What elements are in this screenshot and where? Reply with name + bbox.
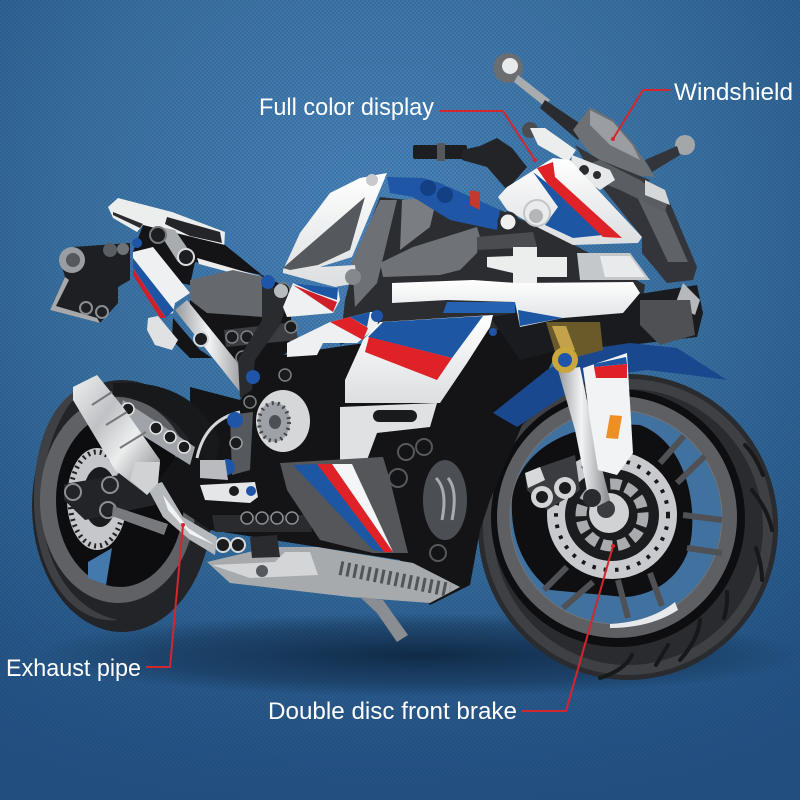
front wheel	[478, 374, 778, 680]
spokes	[544, 436, 722, 618]
front tyre tread cuts	[600, 445, 772, 678]
callout: exhaust pipe: Exhaust pipe	[6, 655, 141, 682]
white tank	[283, 173, 387, 287]
white piston strut	[570, 155, 615, 190]
callout: exhaust pipe	[6, 523, 185, 682]
fork and fender panel	[546, 322, 633, 510]
swingarm beam and arc	[118, 400, 258, 503]
fuel tank	[283, 173, 500, 307]
engine right side	[389, 439, 467, 561]
body dark mass	[150, 310, 560, 605]
handlebar	[413, 138, 527, 190]
tail panel with stripes	[133, 247, 190, 318]
lower fairing with stripes	[280, 457, 408, 553]
lower beam row	[212, 512, 312, 532]
grey rim	[497, 396, 737, 638]
front dark under-fairing	[490, 285, 703, 360]
white connector with cross	[200, 482, 258, 503]
dark right fairing	[580, 160, 697, 283]
front fender	[493, 343, 727, 427]
callout: windshield	[611, 79, 793, 141]
lower exhaust	[207, 535, 460, 603]
small side panel	[283, 283, 340, 317]
upper-left small fairing	[287, 310, 383, 357]
callout: full color display	[259, 94, 537, 162]
rear wheel	[32, 380, 212, 632]
wheel dark hub region	[512, 424, 692, 597]
mirror left	[493, 53, 585, 140]
mirror right	[645, 135, 695, 172]
white strut	[522, 122, 576, 162]
engine clutch cover	[256, 390, 310, 452]
blue pin	[132, 238, 142, 248]
front fairing upper	[498, 158, 642, 245]
main side fairing	[340, 315, 493, 460]
kickstand	[360, 597, 408, 642]
grey side box	[190, 270, 263, 317]
frame beams	[224, 275, 298, 408]
callout: windshield: Windshield	[674, 79, 793, 106]
mid grey fin and bar	[380, 227, 567, 283]
brake caliper	[525, 455, 601, 510]
rear disc	[67, 448, 127, 550]
brake disc	[547, 451, 677, 579]
blue top	[387, 177, 500, 230]
callout: double disc front brake	[268, 544, 615, 725]
headlight	[577, 253, 700, 345]
dark backing behind tank and fairing	[340, 197, 645, 345]
callout: full color display: Full color display	[259, 94, 434, 121]
callout: double disc front brake: Double disc front brake	[268, 698, 517, 725]
windshield	[573, 107, 655, 190]
mid white crossbar	[392, 280, 640, 336]
rear hub and chain stays	[64, 470, 155, 520]
tail lamp block	[50, 243, 130, 323]
dark backing under tail	[190, 275, 292, 385]
muffler	[73, 375, 217, 555]
silver tube	[175, 300, 250, 392]
rear tail unit	[50, 198, 263, 392]
white connector	[147, 316, 178, 350]
seat cowl	[108, 198, 225, 250]
rear fender arch	[113, 383, 220, 470]
motorcycle	[32, 53, 778, 680]
ground shadow	[35, 613, 800, 697]
